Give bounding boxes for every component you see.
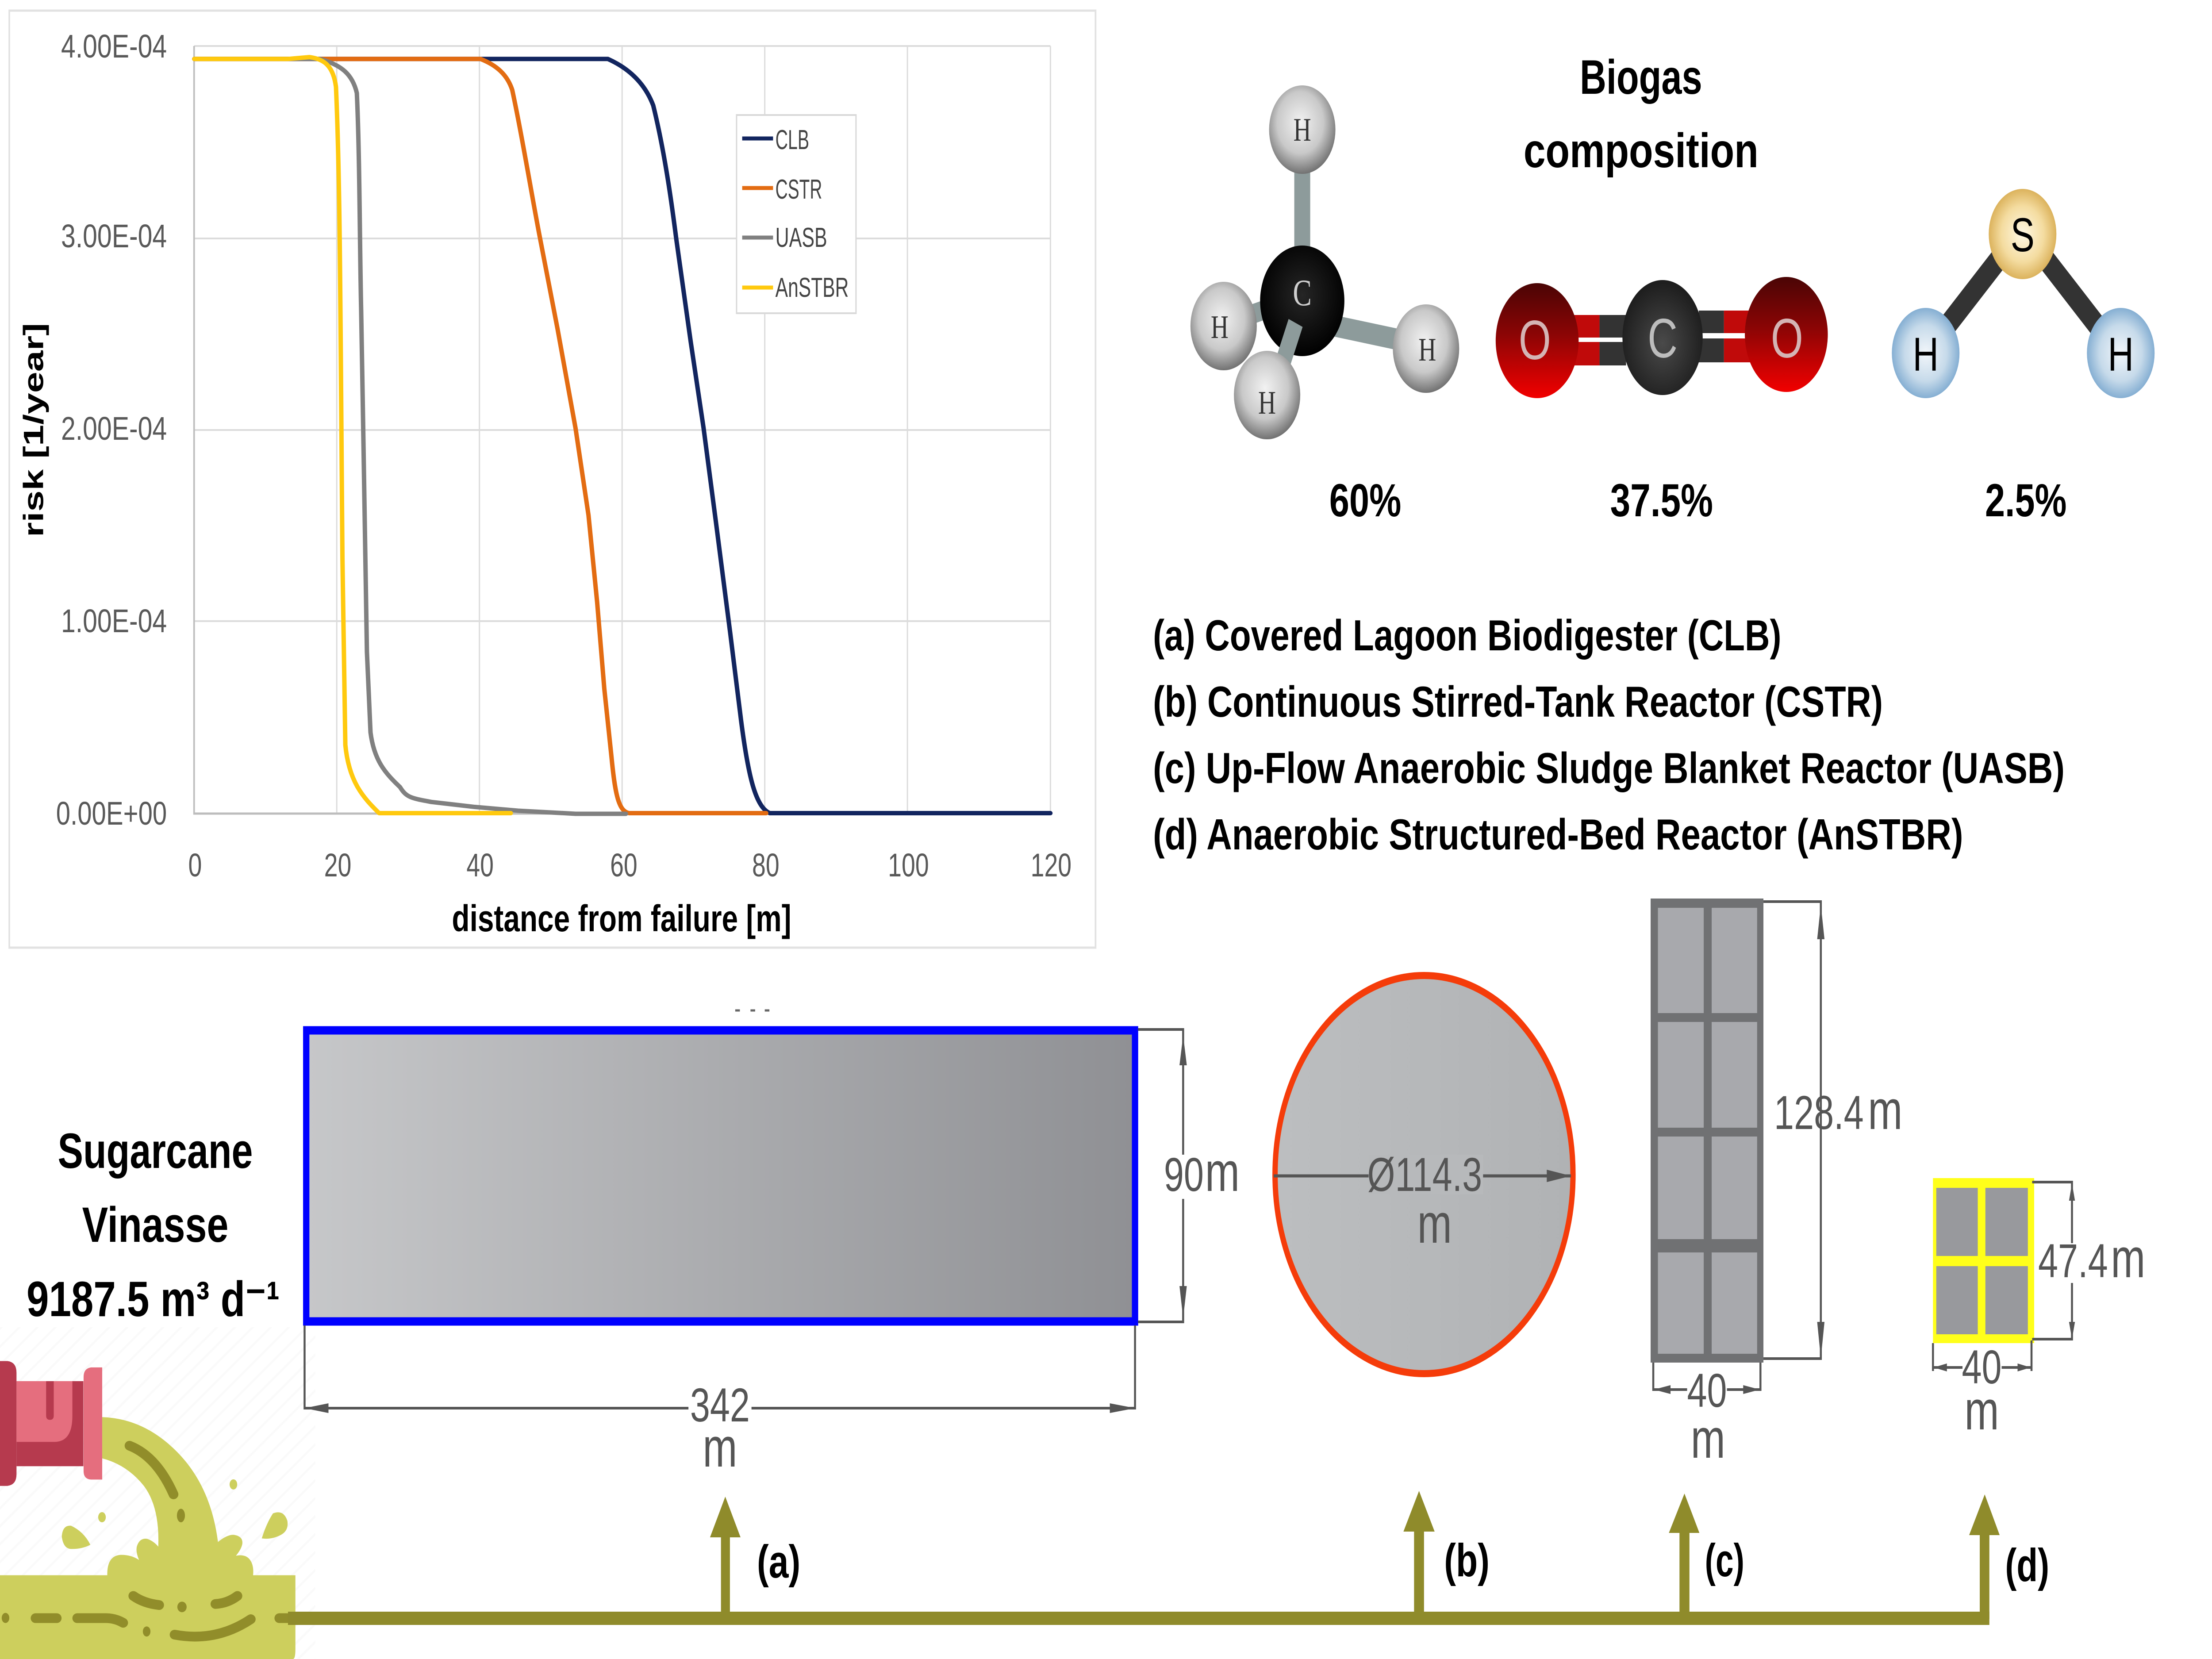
icon: carbon dioxide molecule xyxy=(1496,277,1828,398)
arrow: to reactor a xyxy=(710,1497,741,1619)
icon: hydrogen sulfide molecule: S xyxy=(2011,209,2035,262)
panel: UASB plan (c): 40 xyxy=(1687,1364,1727,1417)
panel: AnSTBR plan (d): m xyxy=(1964,1380,1999,1441)
y-axis tick labels: 4.00E-04 xyxy=(61,28,167,65)
panel: covered lagoon plan (a): m xyxy=(1205,1141,1240,1203)
panel: covered lagoon plan (a): 342 xyxy=(690,1379,750,1432)
x-axis tick labels: 80 xyxy=(752,847,780,883)
x-axis tick labels: 0 xyxy=(188,847,202,883)
icon: methane molecule: H xyxy=(1294,112,1311,148)
risk curves xyxy=(194,57,1050,814)
panel: UASB plan (c): m xyxy=(1868,1079,1902,1141)
percentage labels xyxy=(1329,474,2067,526)
x-axis tick labels: 40 xyxy=(466,847,494,883)
icon: methane molecule: H xyxy=(1418,332,1436,368)
panel: AnSTBR plan (d): 47.4 xyxy=(2038,1235,2108,1288)
y-axis tick labels: 3.00E-04 xyxy=(61,218,167,254)
text block: reactor list: (b) Continuous Stirred-Tank Reactor (CSTR) xyxy=(1153,678,1883,726)
text block: sugarcane vinasse: 9187.5 m³ d⁻¹ xyxy=(27,1271,280,1327)
y-axis title: risk [1/year] xyxy=(18,323,49,537)
percentage labels: 60% xyxy=(1329,474,1401,526)
arrow: to reactor b xyxy=(1403,1491,1435,1619)
arrow labels: (c) xyxy=(1705,1534,1744,1586)
arrow: to reactor d xyxy=(1969,1494,2000,1619)
icon: carbon dioxide molecule: O xyxy=(1771,308,1803,369)
heading: biogas composition: Biogas xyxy=(1580,50,1702,104)
y-axis tick labels: 1.00E-04 xyxy=(61,603,167,639)
icon: methane molecule: H xyxy=(1258,385,1276,421)
panel: covered lagoon plan (a): 90 xyxy=(1164,1148,1204,1202)
feed line with arrows xyxy=(288,1491,2000,1625)
text block: sugarcane vinasse xyxy=(27,1123,280,1327)
heading: biogas composition xyxy=(1524,50,1759,178)
text block: reactor list xyxy=(1153,612,2065,859)
percentage labels: 2.5% xyxy=(1985,474,2067,526)
legend xyxy=(737,115,856,313)
legend: CSTR xyxy=(776,173,822,205)
panel: covered lagoon plan (a): m xyxy=(703,1417,737,1479)
text block: reactor list: (a) Covered Lagoon Biodigester (CLB) xyxy=(1153,612,1782,660)
panel: CSTR circular plan (b): m xyxy=(1417,1193,1452,1255)
panel: UASB plan (c) xyxy=(1651,899,1902,1470)
panel: UASB plan (c): m xyxy=(1691,1408,1725,1470)
panel: AnSTBR plan (d) xyxy=(1933,1178,2145,1441)
arrow labels: (d) xyxy=(2005,1539,2049,1591)
text block: reactor list: (c) Up-Flow Anaerobic Sludge Blanket Reactor (UASB) xyxy=(1153,745,2065,792)
arrow labels: (b) xyxy=(1444,1534,1490,1586)
legend: CLB xyxy=(776,124,809,155)
panel: risk chart xyxy=(9,11,1095,948)
arrow labels xyxy=(757,1534,2049,1591)
icon: carbon dioxide molecule: O xyxy=(1519,310,1551,371)
y-axis tick labels: 2.00E-04 xyxy=(61,410,167,447)
panel: AnSTBR plan (d): m xyxy=(2111,1228,2145,1289)
icon: carbon dioxide molecule: C xyxy=(1647,308,1678,369)
y-axis tick labels: 0.00E+00 xyxy=(56,795,167,832)
x-axis tick labels: 20 xyxy=(324,847,351,883)
panel: CSTR circular plan (b): Ø114.3 xyxy=(1367,1148,1482,1202)
icon: pipe pouring vinasse xyxy=(0,1327,315,1659)
icon: methane molecule: C xyxy=(1293,272,1312,314)
arrow labels: (a) xyxy=(757,1536,800,1588)
x-axis tick labels: 120 xyxy=(1031,847,1071,883)
text block: sugarcane vinasse: Sugarcane xyxy=(58,1123,253,1179)
icon: hydrogen sulfide molecule: H xyxy=(2108,328,2134,381)
arrow: to reactor c xyxy=(1669,1494,1699,1619)
x-axis tick labels: 100 xyxy=(888,847,929,883)
legend: AnSTBR xyxy=(776,272,849,303)
icon: methane molecule xyxy=(1190,85,1459,439)
heading: biogas composition: composition xyxy=(1524,123,1759,178)
x-axis tick labels: 60 xyxy=(610,847,637,883)
panel: AnSTBR plan (d): 40 xyxy=(1962,1341,2002,1394)
text block: reactor list: (d) Anaerobic Structured-Bed Reactor (AnSTBR) xyxy=(1153,811,1963,859)
icon: hydrogen sulfide molecule xyxy=(1892,189,2154,398)
icon: methane molecule: H xyxy=(1211,310,1229,346)
panel: CSTR circular plan (b) xyxy=(1274,975,1573,1374)
percentage labels: 37.5% xyxy=(1610,474,1713,526)
icon: hydrogen sulfide molecule: H xyxy=(1913,328,1939,381)
x-axis title: distance from failure [m] xyxy=(452,898,791,939)
text block: sugarcane vinasse: Vinasse xyxy=(82,1197,228,1252)
panel: UASB plan (c): 128.4 xyxy=(1774,1087,1864,1140)
panel: covered lagoon plan (a) xyxy=(304,1010,1240,1479)
y-axis tick labels xyxy=(56,28,167,832)
x-axis tick labels xyxy=(188,847,1071,883)
legend: UASB xyxy=(776,222,827,253)
